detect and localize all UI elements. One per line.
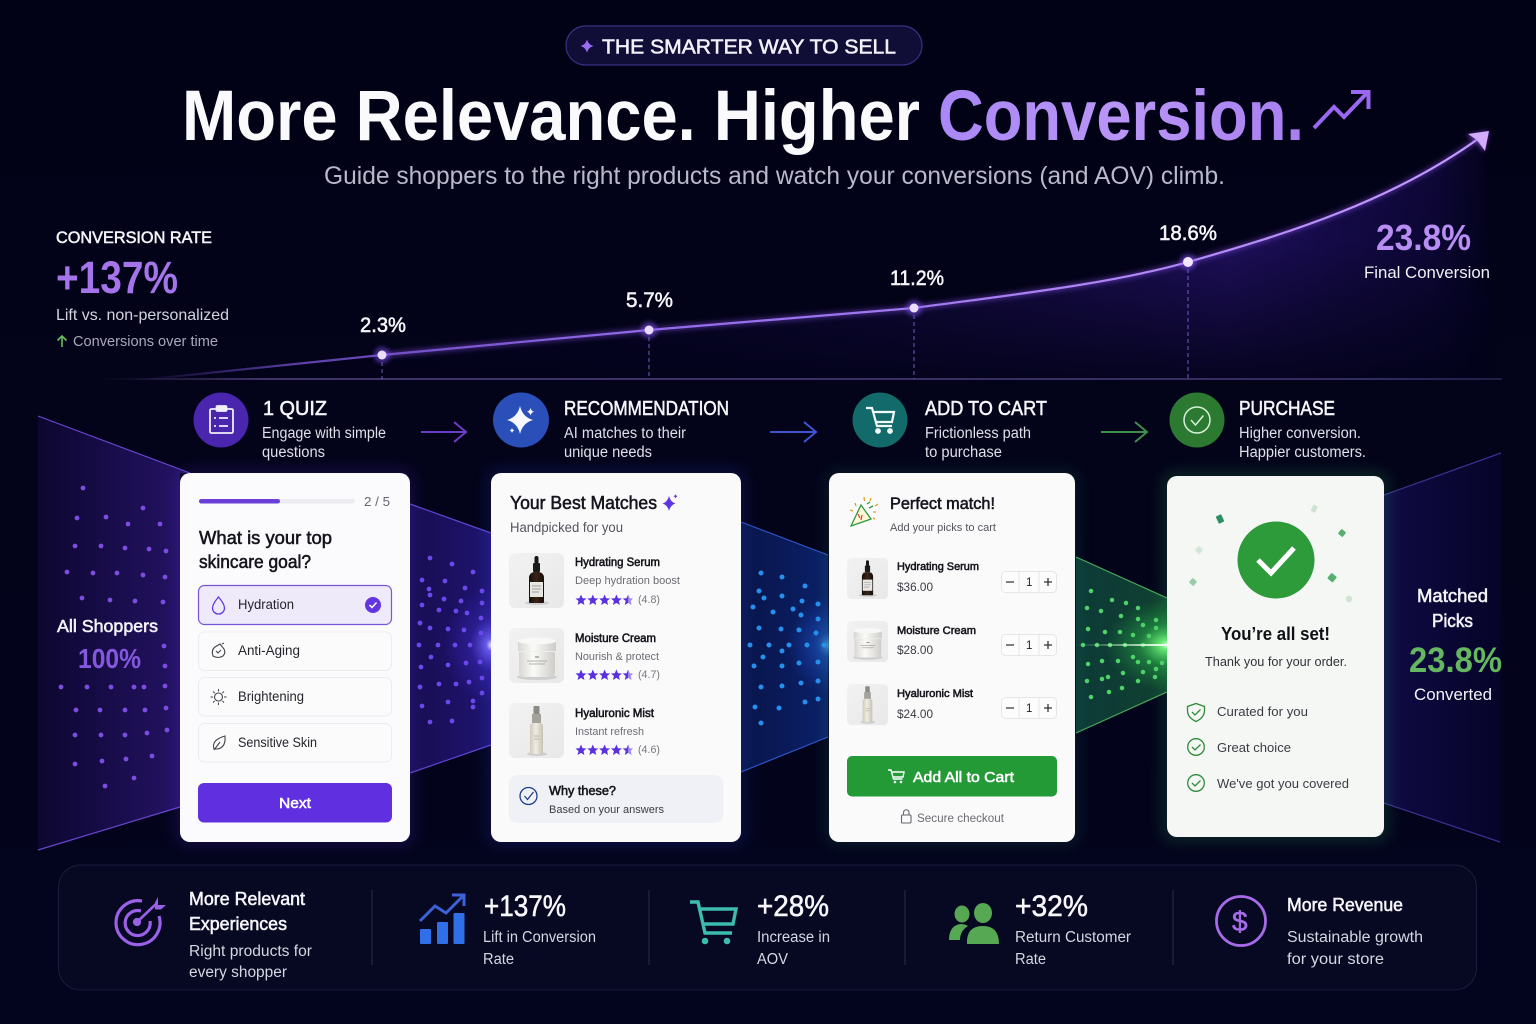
heading: Your Best Matches: [510, 493, 657, 513]
final conversion stat: 23.8%: [1376, 217, 1471, 258]
confirmation message: You’re all set!: [1221, 624, 1330, 644]
conversion rate stat: Conversions over time: [73, 333, 218, 350]
stat: relevant experiences: [116, 889, 312, 981]
callout: why these: [509, 775, 723, 823]
quantity stepper: 1: [1026, 640, 1032, 652]
light beam: [1076, 644, 1167, 646]
progress bar: 2 / 5: [364, 495, 390, 509]
arrow head: [1466, 131, 1489, 152]
conversion growth chart: 2.3%: [360, 314, 406, 337]
heading: Perfect match!: [890, 495, 995, 513]
title: More Relevance. Higher: [182, 77, 920, 156]
progress bar: [199, 495, 390, 509]
product: hyaluronic mist: Hyaluronic Mist: [575, 708, 655, 720]
step: recommendation: RECOMMENDATION: [564, 398, 729, 420]
icon: cart: [866, 408, 894, 433]
quantity stepper: 1: [1026, 577, 1032, 589]
product: hydrating serum: Hydrating Serum: [575, 557, 660, 569]
icon: check circle: [1184, 407, 1210, 433]
conversion growth chart: 18.6%: [1159, 222, 1217, 245]
stat: increase in aov: +28%: [757, 890, 829, 923]
particles: purple: [61, 488, 167, 786]
option: brightening: [198, 678, 392, 716]
button: next: [198, 783, 392, 822]
stat: relevant experiences: every shopper: [189, 964, 287, 981]
conversion rate stat: [56, 228, 229, 350]
stat: return customer: +32%: [1015, 890, 1088, 923]
step: quiz: 1 QUIZ: [263, 398, 327, 420]
cart item: hyaluronic mist: Hyaluronic Mist: [897, 688, 973, 700]
step: quiz: Engage with simple: [262, 425, 386, 442]
stat: lift in conversion: [420, 890, 596, 968]
icon: sparkle: [580, 40, 594, 52]
label: matched picks: 23.8%: [1409, 641, 1502, 680]
label: all shoppers: 100%: [78, 643, 141, 674]
option: sensitive skin: [198, 724, 392, 762]
confirmation message: Thank you for your order.: [1205, 655, 1347, 669]
cart item: hydrating serum: [847, 558, 1056, 599]
option: hydration: [198, 586, 392, 624]
step: add to cart: Frictionless path: [925, 425, 1031, 442]
card: add to cart: [824, 468, 1080, 847]
step: purchase: Happier customers.: [1239, 444, 1366, 461]
option: anti-aging: [198, 632, 392, 670]
panel: bottom stats: [58, 865, 1476, 990]
icon: big check: [1238, 522, 1314, 598]
stat: lift in conversion: Rate: [483, 951, 514, 968]
conversion rate stat: +137%: [56, 252, 178, 303]
step: purchase: PURCHASE: [1239, 398, 1335, 420]
quantity stepper: [1002, 698, 1056, 718]
cart item: hyaluronic mist: [847, 684, 1056, 725]
icon: clipboard: [210, 406, 233, 433]
stat: return customer: Return Customer: [1015, 929, 1131, 946]
step: quiz: questions: [262, 444, 325, 461]
funnel: matched picks panel: [1384, 453, 1502, 842]
button: next: Next: [279, 795, 312, 812]
benefit: great choice: [1188, 739, 1291, 755]
heading: [890, 495, 996, 534]
benefit: covered: We've got you covered: [1217, 777, 1349, 791]
arrow: quiz to recommendation: [421, 422, 466, 442]
icon: bar chart: [420, 895, 464, 944]
product: moisture cream: Nourish & protect: [575, 651, 659, 663]
step: recommendation: [493, 392, 729, 461]
icon: up arrow: [58, 336, 66, 347]
product: hydrating serum: [509, 553, 680, 608]
stat: relevant experiences: More Relevant: [189, 889, 305, 909]
conversion growth chart: 5.7%: [626, 289, 673, 312]
quantity stepper: [1002, 572, 1056, 592]
label: all shoppers: [57, 616, 158, 674]
icon: cart: [690, 902, 736, 944]
step: purchase: Higher conversion.: [1239, 425, 1361, 442]
option: hydration: Hydration: [238, 597, 294, 612]
question: What is your top: [199, 527, 332, 548]
step: add to cart: to purchase: [925, 444, 1002, 461]
stat: increase in aov: Increase in: [757, 929, 830, 946]
benefit: curated: [1188, 704, 1308, 722]
stat: more revenue: More Revenue: [1287, 895, 1403, 915]
step: recommendation: unique needs: [564, 444, 652, 461]
funnel: quiz to recommendation: [410, 504, 539, 773]
stat: lift in conversion: Lift in Conversion: [483, 929, 596, 946]
product: moisture cream: (4.7): [638, 669, 660, 681]
card: quiz: [175, 468, 415, 847]
stat: increase in aov: [690, 890, 830, 968]
stat: return customer: [949, 890, 1131, 968]
badge: the smarter way to sell: [566, 26, 922, 65]
product: hydrating serum: Deep hydration boost: [575, 575, 680, 587]
funnel: all shoppers panel: [38, 416, 190, 850]
icon: sparkles: [507, 406, 534, 434]
card: purchase: [1161, 470, 1390, 843]
label: matched picks: Matched: [1417, 586, 1488, 606]
final conversion stat: [1364, 217, 1490, 282]
product: moisture cream: [509, 628, 660, 683]
icon: title trend arrow: [1314, 92, 1368, 128]
label: matched picks: [1409, 586, 1502, 704]
callout: why these: Based on your answers: [549, 804, 664, 816]
label: matched picks: Picks: [1432, 611, 1473, 631]
secure checkout: Secure checkout: [917, 813, 1005, 825]
product: hyaluronic mist: (4.6): [638, 744, 660, 756]
stat: more revenue: Sustainable growth: [1287, 929, 1423, 946]
secure checkout: [902, 810, 1005, 825]
stat: relevant experiences: Right products for: [189, 943, 312, 960]
quantity stepper: 1: [1026, 703, 1032, 715]
benefit: covered: [1188, 775, 1349, 791]
arrow: cart to purchase: [1101, 422, 1147, 442]
icon: dollar: [1216, 896, 1266, 946]
label: all shoppers: All Shoppers: [57, 616, 158, 636]
confirmation message: [1205, 624, 1347, 669]
step: add to cart: [852, 392, 1047, 461]
stat: more revenue: for your store: [1287, 951, 1384, 968]
stat: increase in aov: AOV: [757, 951, 789, 968]
button: add all to cart: [847, 756, 1057, 796]
stat: more revenue: [1216, 895, 1423, 968]
icon: people: [949, 903, 999, 944]
badge: the smarter way to sell: THE SMARTER WAY TO SELL: [602, 36, 896, 58]
cart item: hydrating serum: $36.00: [897, 580, 933, 594]
icon: dollar: $: [1232, 906, 1248, 937]
option: brightening: Brightening: [238, 689, 304, 704]
callout: why these: Why these?: [549, 784, 616, 798]
funnel: cart to purchase: [1076, 557, 1229, 733]
button: add all to cart: Add All to Cart: [913, 769, 1015, 786]
product: hydrating serum: (4.8): [638, 594, 660, 606]
heading: Handpicked for you: [510, 520, 623, 535]
step: purchase: [1170, 392, 1366, 461]
icon: target: [116, 897, 166, 945]
conversion growth chart: 11.2%: [890, 267, 944, 290]
stat: return customer: Rate: [1015, 951, 1046, 968]
product: hyaluronic mist: Instant refresh: [575, 726, 644, 738]
heading: [510, 493, 678, 535]
arrow: recommendation to cart: [770, 422, 816, 442]
label: matched picks: Converted: [1414, 685, 1492, 704]
question: skincare goal?: [199, 551, 311, 572]
product: hyaluronic mist: [509, 703, 660, 758]
quantity stepper: [1002, 634, 1056, 656]
icon: party popper: [850, 497, 878, 526]
benefit: great choice: Great choice: [1217, 741, 1291, 755]
stat: lift in conversion: +137%: [484, 890, 566, 923]
card: recommendations: [486, 468, 746, 847]
step: quiz: [194, 392, 386, 461]
conversion growth chart: [100, 131, 1502, 380]
step: add to cart: ADD TO CART: [925, 398, 1047, 420]
title: Conversion.: [938, 77, 1304, 156]
stat: relevant experiences: Experiences: [189, 914, 287, 934]
cart item: moisture cream: $28.00: [897, 643, 933, 657]
product: moisture cream: Moisture Cream: [575, 633, 656, 645]
option: sensitive skin: Sensitive Skin: [238, 735, 317, 750]
subtitle: Guide shoppers to the right products and watch your conversions (and AOV) climb.: [324, 162, 1225, 190]
heading: Add your picks to cart: [890, 522, 996, 534]
benefit: curated: Curated for you: [1217, 705, 1308, 719]
conversion rate stat: CONVERSION RATE: [56, 228, 212, 247]
funnel: recommendation to cart: [741, 522, 868, 772]
option: anti-aging: Anti-Aging: [238, 643, 300, 658]
cart item: hyaluronic mist: $24.00: [897, 707, 933, 721]
cart item: hydrating serum: Hydrating Serum: [897, 561, 979, 573]
confetti: [1189, 504, 1352, 602]
cart item: moisture cream: [847, 621, 1056, 662]
question: [199, 527, 332, 572]
final conversion stat: Final Conversion: [1364, 263, 1490, 282]
step: recommendation: AI matches to their: [564, 425, 686, 442]
conversion rate stat: Lift vs. non-personalized: [56, 307, 229, 324]
cart item: moisture cream: Moisture Cream: [897, 625, 976, 637]
